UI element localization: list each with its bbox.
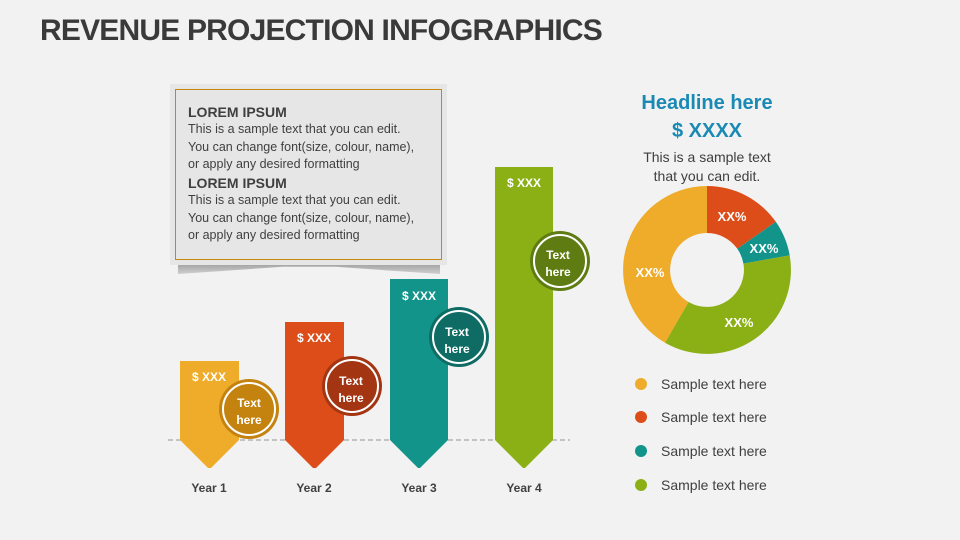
bar: year 2: Text: [339, 374, 363, 388]
donut chart: XX%: [718, 209, 747, 224]
bar: year 4: here: [545, 265, 571, 279]
panel: text box: This is a sample text that you can edit.: [188, 122, 401, 136]
bar: year 4: $ XXX: [507, 176, 541, 190]
panel: text box: or apply any desired formatting: [188, 157, 360, 171]
donut chart: XX%: [636, 265, 665, 280]
legend: Sample text here: [661, 443, 767, 459]
bar: year 1: here: [236, 413, 262, 427]
donut chart: XX%: [725, 315, 754, 330]
panel: text box: LOREM IPSUM: [188, 104, 287, 120]
headline: Headline here: [641, 92, 773, 114]
text box shadow: [178, 265, 440, 274]
year labels: Year 3: [401, 481, 437, 495]
panel: text box: or apply any desired formatting: [188, 228, 360, 242]
headline: This is a sample text: [643, 149, 771, 165]
panel: text box: This is a sample text that you can edit.: [188, 193, 401, 207]
panel: text box: LOREM IPSUM: [188, 175, 287, 191]
year labels: Year 1: [191, 481, 227, 495]
legend: Sample text here: [661, 376, 767, 392]
panel: text box: [170, 84, 447, 265]
bar: year 3: Text: [445, 325, 469, 339]
bar: year 3: here: [444, 342, 470, 356]
bar: year 2: [285, 322, 382, 468]
bar: year 2: here: [338, 391, 364, 405]
bar: year 4: [495, 167, 590, 468]
bar: year 1: Text: [237, 396, 261, 410]
headline: that you can edit.: [654, 168, 760, 184]
headline: $ XXXX: [672, 120, 742, 142]
year labels: [191, 481, 542, 495]
year labels: Year 4: [506, 481, 542, 495]
bar: year 2: $ XXX: [297, 331, 331, 345]
year labels: Year 2: [296, 481, 332, 495]
bar: year 1: [180, 361, 279, 468]
bar: year 3: $ XXX: [402, 289, 436, 303]
panel: text box: You can change font(size, colour, name),: [188, 140, 414, 154]
panel: text box: You can change font(size, colour, name),: [188, 211, 414, 225]
legend: [635, 376, 767, 493]
title: REVENUE PROJECTION INFOGRAPHICS: [40, 14, 602, 47]
bar: year 4: Text: [546, 248, 570, 262]
headline: [641, 92, 773, 184]
legend: Sample text here: [661, 477, 767, 493]
bar: year 1: $ XXX: [192, 370, 226, 384]
donut chart: XX%: [750, 241, 779, 256]
donut chart: [623, 186, 791, 354]
bar: year 3: [390, 279, 489, 468]
legend: Sample text here: [661, 409, 767, 425]
